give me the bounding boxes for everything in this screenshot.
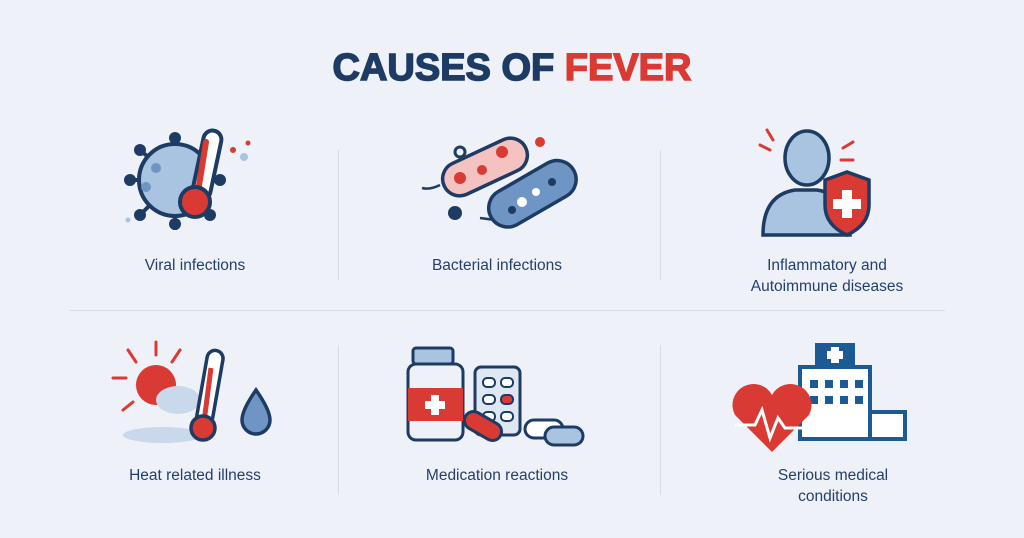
label: inflammatory (750, 257, 903, 295)
label: serious (778, 467, 888, 505)
icon: virus with thermometer (124, 128, 250, 230)
icon: medication (406, 346, 584, 446)
label: viral: Viral infections (145, 257, 245, 274)
icon: heat (112, 340, 272, 443)
label: medication: Medication reactions (426, 467, 568, 484)
label: heat: Heat related illness (129, 467, 261, 484)
icon: hospital and heart (732, 343, 907, 452)
label: inflammatory: Autoimmune diseases (751, 278, 903, 295)
icon: bacteria (422, 136, 578, 229)
label: bacterial: Bacterial infections (432, 257, 562, 274)
label: serious: Serious medical (778, 467, 888, 484)
icon: person with shield (758, 128, 871, 237)
title: CAUSES OF FEVER (333, 47, 691, 89)
label: serious: conditions (798, 488, 868, 505)
label: inflammatory: Inflammatory and (767, 257, 887, 274)
